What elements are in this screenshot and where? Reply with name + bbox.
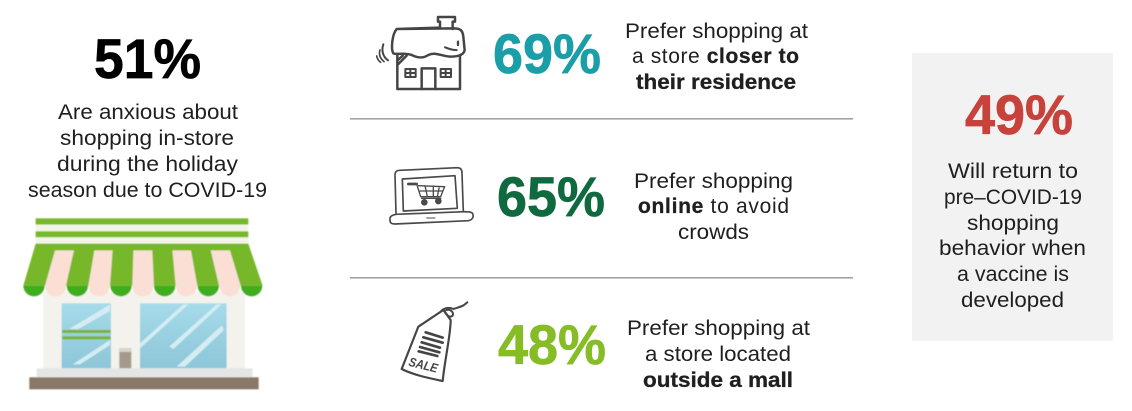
- text block: outside a mall: outside a mall: [643, 369, 793, 392]
- statistic: 69%: 69%: [493, 22, 601, 85]
- text block: return to behavior: pre–COVID-19: [944, 186, 1082, 209]
- statistic: 49%: 49%: [965, 83, 1073, 146]
- text block: online to avoid crowds: [634, 170, 793, 244]
- icon: storefront: [23, 218, 263, 389]
- text block: closer to residence: their residence: [636, 71, 796, 94]
- icon: laptop with cart: [390, 168, 473, 224]
- panel: online shopping: [390, 165, 793, 244]
- text block: anxious about shopping: during the holiday: [57, 153, 239, 176]
- text block: online to avoid crowds: Prefer shopping: [634, 170, 793, 193]
- divider: [350, 118, 853, 120]
- icon: house: [377, 17, 465, 89]
- text block: closer to residence: [625, 20, 808, 94]
- text block: outside a mall: Prefer shopping at: [627, 317, 810, 340]
- text block: closer to residence: Prefer shopping at: [625, 20, 808, 43]
- text block: anxious about shopping: Are anxious about: [58, 101, 238, 124]
- text block: online to avoid crowds: crowds: [678, 221, 749, 244]
- panel: anxious shoppers: [23, 27, 267, 389]
- text block: return to behavior: developed: [961, 289, 1064, 312]
- icon: sale tag: SALE: [407, 355, 440, 376]
- panel background: [912, 53, 1113, 341]
- text block: return to behavior: shopping: [967, 212, 1059, 235]
- statistic: 48%: 48%: [498, 313, 606, 376]
- panel: closer to residence: [377, 17, 808, 94]
- text block: return to behavior: behavior when: [939, 237, 1086, 260]
- text block: return to behavior: a vaccine is: [957, 263, 1069, 286]
- text block: return to behavior: Will return to: [948, 160, 1078, 183]
- statistic: 51%: 51%: [94, 27, 201, 90]
- text block: return to behavior: [939, 160, 1086, 312]
- text block: anxious about shopping: [28, 101, 267, 202]
- text block: online to avoid crowds: online to avoid: [638, 195, 789, 218]
- panel: return to pre-COVID behavior: [912, 53, 1113, 341]
- text block: closer to residence: a store closer to: [632, 45, 799, 68]
- text block: outside a mall: [627, 317, 810, 392]
- statistic: 65%: 65%: [497, 165, 605, 228]
- icon: sale tag: [402, 302, 467, 381]
- text block: anxious about shopping: season due to COVID-19: [28, 179, 267, 202]
- panel: outside a mall: [402, 302, 810, 392]
- divider: [350, 277, 853, 279]
- text block: outside a mall: a store located: [645, 343, 791, 366]
- text block: anxious about shopping: shopping in-store: [60, 127, 234, 150]
